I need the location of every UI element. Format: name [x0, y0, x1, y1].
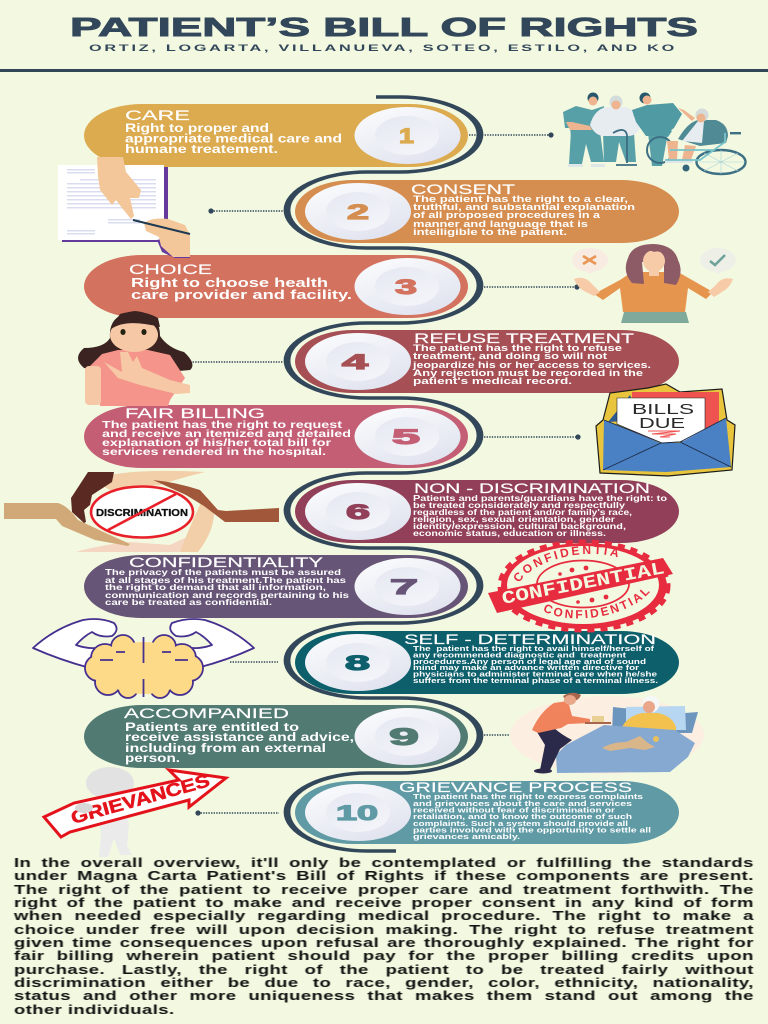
closing summary paragraph: right of the patient to make and receive proper consent in any kind of form — [14, 895, 754, 910]
closing summary paragraph: choice under free will upon decision making. The right to refuse treatment — [14, 922, 754, 937]
text: grievance process description: grievances amicably. — [413, 832, 520, 841]
heading: non-discrimination: NON - DISCRIMINATION — [414, 481, 650, 496]
number badge 8 — [305, 634, 411, 691]
panel: 6 non-discrimination — [295, 480, 679, 543]
text: grievance process description: received without fear of discrimination or — [413, 806, 615, 814]
illustration: care team and wheelchair — [563, 92, 746, 174]
text: choice description: care provider and facility. — [131, 288, 352, 302]
heading: choice: CHOICE — [129, 262, 212, 277]
heading: grievance process: GRIEVANCE PROCESS — [399, 780, 632, 795]
dotted connector 5 — [484, 434, 581, 440]
text: care description: humane treatement. — [125, 144, 278, 156]
letter with bills due: DUE — [639, 416, 685, 432]
number badge 5: 5 — [392, 426, 421, 449]
text: non-discrimination description: be treated considerately and respectfully — [413, 501, 626, 510]
heading: self-determination: SELF - DETERMINATION — [404, 632, 656, 647]
panel: 2 consent — [295, 180, 679, 243]
heading: care: CARE — [125, 108, 190, 123]
no-discrimination sign: DISCRIMINATION — [96, 507, 188, 519]
closing summary paragraph: purchase. Lastly, the right of the patient to be treated fairly without — [14, 962, 754, 977]
panel: 1 care — [84, 104, 468, 167]
closing summary paragraph: other individuals. — [14, 1002, 175, 1017]
number badge 3: 3 — [395, 276, 417, 299]
illustration: worried woman — [78, 311, 192, 406]
text: refuse treatment description: treatment, and doing so will not — [413, 351, 607, 361]
text: grievance process description: retaliation, and to know the outcome of such — [413, 812, 632, 821]
closing summary paragraph: under Magna Carta Patient's Bill of Rights if these components are present. — [14, 868, 754, 883]
closing summary paragraph: given time consequences upon refusal are thoroughly explained. The right for — [14, 935, 754, 950]
illustration: person with grievances arrow — [44, 767, 226, 857]
panel: 3 choice — [84, 255, 468, 318]
panel: 9 accompanied — [84, 705, 468, 768]
text: fair billing description — [102, 420, 351, 458]
text: grievance process description: and grievances about the care and services — [413, 799, 632, 808]
dotted connector 4 — [190, 361, 283, 363]
text: self-determination description — [413, 644, 658, 685]
text: care description: Right to proper and — [125, 123, 269, 135]
letter with bills due: BILLS — [632, 402, 694, 418]
number badge 8: 8 — [345, 652, 371, 675]
text: non-discrimination description — [413, 494, 667, 538]
number badge 10: 10 — [336, 802, 378, 825]
text: choice description: Right to choose health — [131, 276, 328, 290]
text: consent description — [413, 194, 635, 237]
text: confidentiality description: care be treated as confidential. — [105, 597, 272, 607]
heading: refuse treatment: REFUSE TREATMENT — [414, 331, 634, 346]
text: non-discrimination description: regardless of the patient and/or family's race, — [413, 508, 632, 517]
number badge 2: 2 — [347, 201, 369, 224]
number badge 2 — [305, 183, 411, 240]
number badge 9 — [354, 708, 460, 765]
panel: 7 confidentiality — [84, 555, 468, 618]
number badge 7: 7 — [390, 576, 418, 599]
text: consent description: of all proposed procedures in a — [413, 210, 600, 220]
letter with bills due — [617, 398, 705, 443]
number badge 3 — [354, 258, 460, 315]
number badge 1 — [354, 107, 460, 164]
arrow label: GRIEVANCES — [69, 770, 212, 828]
text: fair billing description: explanation of his/her total bill for — [102, 438, 331, 449]
dotted connector 2 — [208, 208, 284, 214]
text: confidentiality description: at all stages of his treatment.The patient has — [105, 575, 346, 585]
text: fair billing description: The patient has the right to request — [102, 420, 343, 431]
text: grievance process description: complaints. Such a system should provide all — [413, 819, 628, 828]
stamp ring text top: CONFIDENTIAL — [514, 546, 618, 582]
text: refuse treatment description: Any rejection must be recorded in the — [413, 368, 643, 378]
no-discrimination sign — [91, 486, 193, 538]
text: confidentiality description: communication and records pertaining to his — [105, 590, 349, 600]
closing summary paragraph: The right of the patient to receive proper care and treatment forthwith. The — [14, 882, 754, 897]
text: self-determination description: physicians to administer terminal care when he/she — [413, 670, 657, 678]
text: self-determination description: any recommended diagnostic and treatment — [413, 650, 627, 660]
text: refuse treatment description: The patient has the right to refuse — [413, 343, 622, 353]
dotted connector 8 — [230, 661, 278, 663]
heading: fair billing: FAIR BILLING — [125, 406, 265, 421]
stamp ring text bottom: CONFIDENTIAL — [544, 590, 650, 618]
stamp stars — [558, 566, 608, 604]
panel: 10 grievance process — [295, 780, 679, 844]
number badge 7 — [354, 558, 460, 615]
text: self-determination description: mind may make an advance written directive for — [413, 663, 639, 672]
illustration: signing a document — [58, 157, 190, 258]
illustration: woman choosing — [572, 244, 736, 323]
text: self-determination description: suffers from the terminal phase of a terminal illness. — [413, 676, 658, 685]
illustration: discrimination hands — [4, 471, 279, 552]
closing summary paragraph: discrimination either be due to race, gender, color, ethnicity, nationality, — [14, 975, 754, 990]
number badge 6 — [305, 483, 411, 540]
dotted connector 10 — [195, 810, 279, 816]
illustration: strong brain — [33, 619, 254, 698]
number badge 10 — [305, 784, 411, 841]
title: PATIENT’S BILL OF RIGHTS — [70, 12, 698, 42]
panel: 8 self-determination — [295, 631, 679, 694]
text: refuse treatment description: jeopardize his or her access to services. — [412, 360, 651, 370]
text: consent description: intelligible to the patient. — [413, 227, 567, 237]
text: self-determination description: The patient has the right to avail himself/herself of — [413, 644, 655, 653]
text: consent description: The patient has the right to a clear, — [413, 194, 628, 204]
dotted connector 1 — [469, 132, 554, 138]
text: refuse treatment description: patient's medical record. — [413, 376, 572, 386]
text: refuse treatment description — [412, 343, 651, 386]
text: care description — [125, 123, 342, 156]
text: confidentiality description — [105, 567, 349, 607]
text: consent description: truthful, and substantial explanation — [413, 202, 635, 212]
text: fair billing description: and receive an itemized and detailed — [102, 429, 351, 440]
text: non-discrimination description: economic status, education or illness. — [413, 529, 606, 538]
heading: consent: CONSENT — [411, 182, 515, 197]
closing summary paragraph: status and other more uniqueness that makes them stand out among the — [14, 988, 754, 1003]
panel: 4 refuse treatment — [295, 330, 679, 393]
stamp banner text: CONFIDENTIAL — [500, 559, 666, 610]
dotted connector 9 — [484, 734, 512, 736]
illustration: bills due envelope — [596, 384, 735, 476]
text: care description: appropriate medical care and — [125, 134, 342, 146]
text: fair billing description: services rendered in the hospital. — [102, 447, 326, 458]
number badge 4 — [305, 333, 411, 390]
illustration: confidential stamp — [488, 540, 673, 632]
text: consent description: manner and language that is — [413, 219, 588, 229]
text: accompanied description: person. — [125, 753, 180, 765]
number badge 1: 1 — [399, 125, 414, 148]
text: accompanied description — [125, 722, 354, 765]
text: choice description — [131, 276, 352, 302]
panel: 5 fair billing — [84, 405, 468, 468]
text: accompanied description: including from an external — [125, 743, 326, 755]
text: grievance process description: The patient has the right to express complaints — [413, 792, 643, 801]
text: non-discrimination description: religion, sex, sexual orientation, gender — [413, 515, 615, 524]
number badge 5 — [354, 408, 460, 465]
heading: confidentiality: CONFIDENTIALITY — [129, 555, 323, 570]
number badge 9: 9 — [389, 724, 419, 751]
illustration: caregiver at bedside — [510, 693, 704, 774]
heading: accompanied: ACCOMPANIED — [124, 706, 289, 721]
text: grievance process description: parties involved with the opportunity to settle all — [413, 826, 651, 834]
text: self-determination description: procedures.Any person of legal age and of sound — [413, 657, 646, 666]
number badge 6: 6 — [346, 501, 370, 524]
dotted connector 3 — [484, 284, 580, 290]
number badge 4: 4 — [342, 351, 369, 374]
text: grievance process description — [413, 792, 651, 841]
text: non-discrimination description: identity/expression, cultural background, — [413, 522, 626, 531]
serpentine connector line — [287, 97, 480, 851]
authors subtitle: ORTIZ, LOGARTA, VILLANUEVA, SOTEO, ESTILO, AND KO — [89, 43, 677, 54]
text: non-discrimination description: Patients and parents/guardians have the right: to — [413, 494, 667, 503]
text: accompanied description: Patients are entitled to — [125, 722, 299, 734]
text: confidentiality description: The privacy of the patients must be assured — [105, 567, 341, 577]
closing summary paragraph: fair billing wherein patient should pay for the proper billing credits upon — [14, 948, 754, 963]
closing summary paragraph: In the overall overview, it'll only be contemplated or fulfilling the standards — [14, 855, 754, 870]
text: accompanied description: receive assistance and advice, — [125, 732, 354, 744]
closing summary paragraph: when needed especially regarding medical procedure. The right to make a — [14, 908, 754, 923]
closing summary paragraph — [13, 855, 754, 1017]
text: confidentiality description: the right to demand that all information, — [105, 582, 326, 592]
